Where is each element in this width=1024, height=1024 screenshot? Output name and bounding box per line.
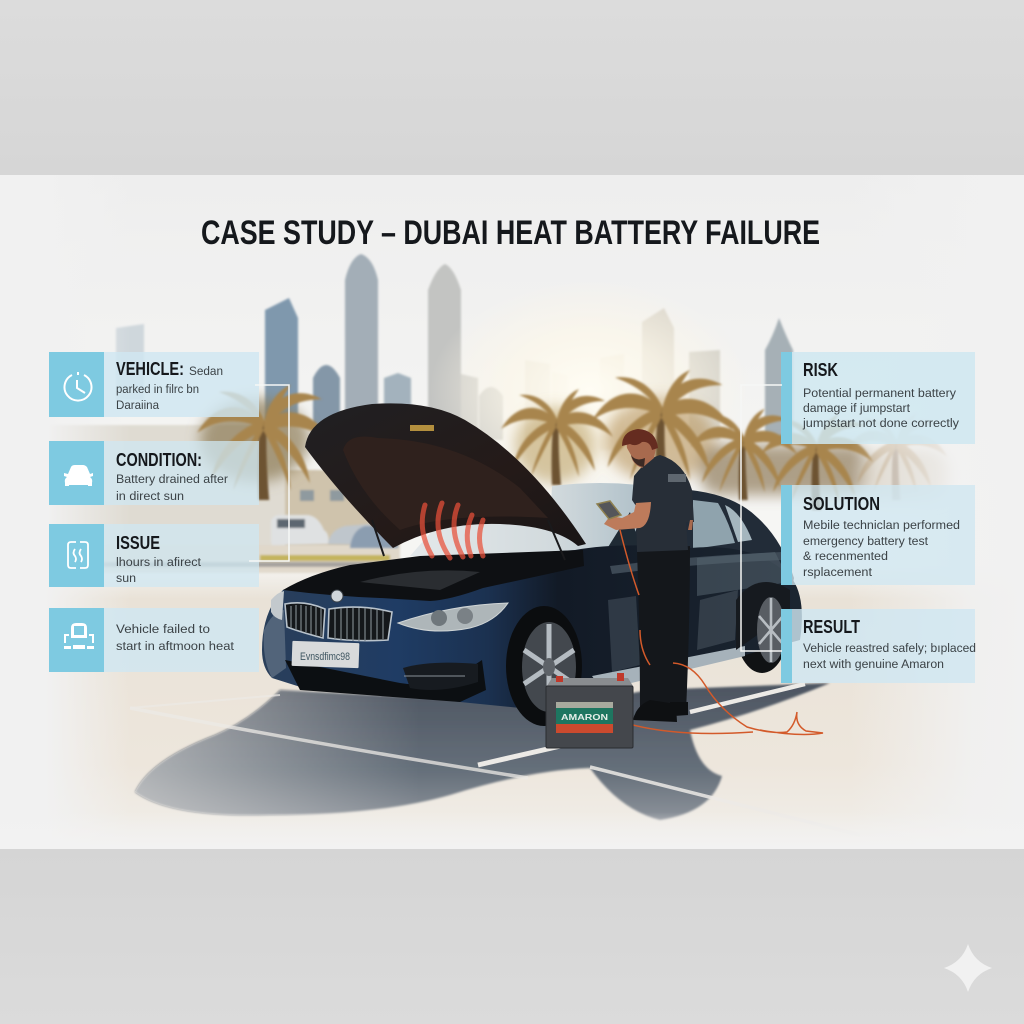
vehicle text: VEHICLE: <box>116 359 184 379</box>
icon: battery heat bracket <box>68 542 88 568</box>
result text: next with genuine Amaron <box>803 657 944 671</box>
icon: engine <box>64 623 94 649</box>
failure text: start in aftmoon heat <box>116 639 235 653</box>
rear wheel rim <box>736 582 790 663</box>
technician <box>597 429 694 722</box>
grille <box>285 603 392 641</box>
icon: clock <box>64 372 92 401</box>
top gray band <box>0 0 1024 175</box>
icon: car <box>64 465 93 486</box>
car body <box>262 545 802 712</box>
number plate <box>292 641 359 668</box>
solution text: SOLUTION <box>803 494 880 514</box>
result text: RESULT <box>803 617 860 637</box>
battery <box>546 673 633 748</box>
icon: sparkle watermark <box>944 944 992 992</box>
risk text: jumpstart not done correctly <box>802 416 960 430</box>
heat waves <box>422 503 483 558</box>
arm <box>604 502 651 530</box>
number plate: Evnsdfimc98 <box>300 651 350 663</box>
side and bottom fades <box>0 175 130 849</box>
headlight left <box>271 591 284 620</box>
result text: Vehicle reastred safely; bıplaced <box>803 641 976 655</box>
hood inner lining <box>343 436 548 530</box>
panel: result <box>781 609 976 683</box>
failure text: Vehicle failed to <box>116 622 210 636</box>
skyline <box>116 254 793 450</box>
battery top <box>547 678 633 686</box>
vehicle text: Daraiina <box>116 398 159 412</box>
engine bay <box>283 550 584 601</box>
BMW badge <box>331 590 343 602</box>
issue text: lhours in afirect <box>116 555 202 569</box>
result text <box>803 617 976 671</box>
vehicle text: parked in filrc bn <box>116 382 199 396</box>
shadow left fade <box>135 690 420 815</box>
panel: vehicle <box>49 352 259 417</box>
condition text: in direct sun <box>116 489 184 503</box>
parked vehicles in background <box>271 515 398 548</box>
risk text: damage if jumpstart <box>803 401 911 415</box>
risk text: RISK <box>803 360 838 380</box>
bottom gray band <box>0 849 1024 1024</box>
car <box>262 483 802 726</box>
solution text <box>803 494 960 579</box>
bumper corner reflection <box>264 610 286 678</box>
hood latch label <box>410 425 434 431</box>
sky background <box>0 175 1024 849</box>
pavement <box>0 565 1024 849</box>
torso <box>632 455 694 552</box>
terminals <box>556 676 563 682</box>
white callout connector lines <box>249 385 782 651</box>
hood struts <box>372 520 565 560</box>
condition text: CONDITION: <box>116 450 202 470</box>
windshield and silver roof <box>410 483 648 560</box>
car shadow on pavement <box>135 683 830 820</box>
panel: issue <box>49 524 259 587</box>
shoes <box>633 700 688 722</box>
panel: condition <box>49 441 259 505</box>
condition text <box>116 450 228 503</box>
jumper cables <box>620 530 823 734</box>
car roof <box>590 486 794 600</box>
vehicle text: Sedan <box>189 364 223 378</box>
title: CASE STUDY – DUBAI HEAT BATTERY FAILURE <box>201 214 820 252</box>
solution text: Mebile techniclan performed <box>803 518 960 532</box>
solution text: emergency battery test <box>803 534 929 548</box>
risk text <box>802 360 960 430</box>
panel: solution <box>781 485 975 585</box>
issue text: sun <box>116 571 136 585</box>
condition text: Battery drained after <box>116 472 228 486</box>
foliage masses <box>200 398 950 500</box>
photo panel: Dubai parking lot scene <box>0 175 1024 849</box>
hood panel <box>305 403 586 548</box>
open hood <box>305 403 586 560</box>
head <box>622 429 658 468</box>
panel: failure <box>49 608 259 672</box>
issue text <box>116 533 202 585</box>
shirt logo <box>668 474 686 482</box>
failure text <box>116 622 235 653</box>
rear tyre <box>736 587 788 673</box>
front wheel <box>506 606 582 726</box>
door crease and shine <box>610 552 782 574</box>
battery label: AMARON <box>561 713 608 722</box>
battery casing <box>546 686 633 748</box>
parking lines <box>130 684 860 835</box>
solution text: rsplacement <box>803 565 873 579</box>
side windows <box>693 500 735 549</box>
palm trees <box>197 370 947 510</box>
sun glow <box>430 280 750 500</box>
sill <box>592 646 745 690</box>
solution text: & recenmented <box>803 549 888 563</box>
vehicle text <box>116 359 223 412</box>
panel: risk <box>781 352 975 444</box>
far arm <box>688 520 693 530</box>
headlight right <box>398 603 508 631</box>
lower bumper <box>285 660 486 702</box>
background buildings and street <box>50 425 400 573</box>
risk text: Potential permanent battery <box>803 386 957 400</box>
tablet <box>597 501 621 519</box>
legs <box>637 546 690 712</box>
issue text: ISSUE <box>116 533 160 553</box>
